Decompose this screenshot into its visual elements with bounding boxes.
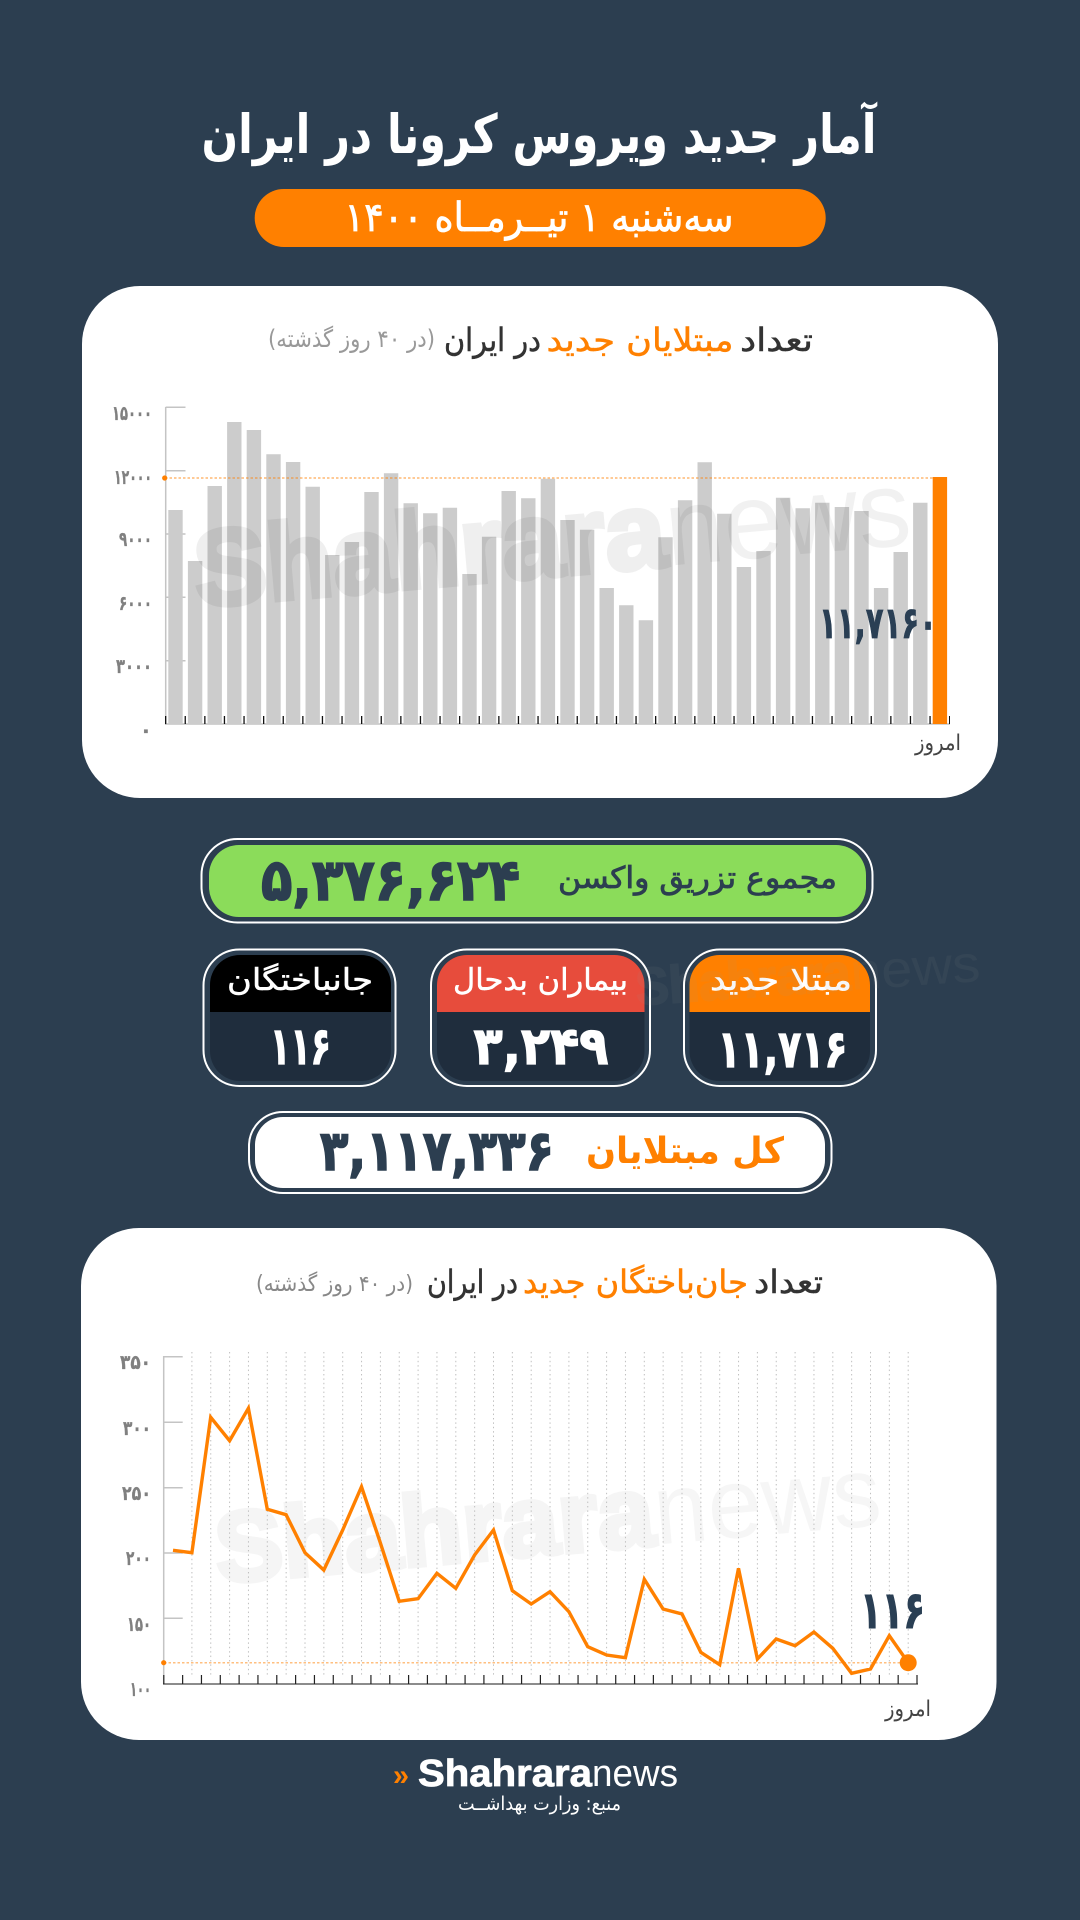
y axis labels xyxy=(120,1350,151,1701)
watermark: stats area xyxy=(634,935,982,1017)
footer logo: Shahrara xyxy=(418,1753,593,1795)
stat: total cases: کل مبتلایان xyxy=(586,1131,784,1172)
stat: critical patients xyxy=(431,950,650,1086)
heading: new cases: (در ۴۰ روز گذشته) xyxy=(268,325,435,353)
axis ticks xyxy=(163,1680,918,1684)
heading: deaths xyxy=(256,1263,823,1301)
today's point xyxy=(900,1654,917,1671)
y axis labels: ۲۰۰ xyxy=(126,1546,151,1570)
watermark xyxy=(210,1435,885,1605)
watermark: news xyxy=(648,1435,885,1567)
stat: critical patients: ۳,۲۴۹ xyxy=(474,1017,608,1077)
label: today: امروز xyxy=(884,1697,931,1722)
heading: new cases xyxy=(268,321,813,359)
footer logo: » xyxy=(393,1759,409,1792)
stat: total vaccinations xyxy=(202,839,872,922)
panel: new cases chart xyxy=(82,286,998,798)
y axis labels xyxy=(112,401,152,742)
watermark: Shahrara xyxy=(210,1455,660,1605)
panel: deaths chart xyxy=(81,1228,996,1740)
stat: new cases: ۱۱,۷۱۶ xyxy=(718,1020,848,1080)
axis lines xyxy=(164,1356,183,1684)
value label: today: ۱۱,۷۱۶۰ xyxy=(819,598,937,649)
vertical grid xyxy=(191,1352,909,1676)
watermark: news xyxy=(660,447,915,589)
line series: deaths xyxy=(173,1408,908,1673)
y axis labels: ۰ xyxy=(140,718,152,742)
y axis labels: ۱۲۰۰۰ xyxy=(114,465,152,489)
date pill: سه‌شنبه ۱ تیــرمــاه ۱۴۰۰ xyxy=(344,195,734,241)
heading: new cases: مبتلایان جدید xyxy=(546,321,734,359)
stat: deaths xyxy=(204,950,396,1086)
heading: deaths: در ایران xyxy=(427,1263,518,1301)
y axis labels: ۳۵۰ xyxy=(120,1350,151,1374)
axis lines xyxy=(165,407,950,725)
title: آمار جدید ویروس کرونا در ایران xyxy=(202,101,878,166)
date pill xyxy=(255,189,826,247)
axis ticks xyxy=(165,716,950,724)
heading: new cases: تعداد xyxy=(740,321,813,359)
watermark: Shahrara xyxy=(188,468,671,630)
y axis labels: ۶۰۰۰ xyxy=(119,591,152,615)
y axis labels: ۹۰۰۰ xyxy=(119,527,152,551)
bar: today xyxy=(933,477,947,724)
value label: today: ۱۱۶ xyxy=(860,1581,925,1641)
y axis labels: ۱۰۰ xyxy=(130,1677,151,1701)
stat: new cases: مبتلا جدید xyxy=(710,963,852,998)
watermark xyxy=(188,447,915,630)
today's reference line xyxy=(162,475,933,481)
y axis labels: ۲۵۰ xyxy=(122,1481,151,1505)
watermark: stats area: Shahrara xyxy=(634,944,853,1017)
stat: new cases xyxy=(684,950,876,1086)
footer logo: news xyxy=(592,1753,678,1795)
stat: total vaccinations: ۵,۳۷۶,۶۲۴ xyxy=(261,846,520,914)
y axis labels: ۳۰۰۰ xyxy=(116,654,152,678)
y axis labels: ۱۵۰ xyxy=(127,1612,151,1636)
y axis labels: ۱۵۰۰۰ xyxy=(112,401,152,425)
heading: deaths: جان‌باختگان جدید xyxy=(523,1263,748,1301)
watermark: stats area: news xyxy=(848,935,982,1002)
stat: deaths: جانباختگان xyxy=(227,963,373,998)
footer logo xyxy=(393,1753,678,1795)
stat: deaths: ۱۱۶ xyxy=(270,1017,331,1077)
stat: critical patients: بیماران بدحال xyxy=(453,963,628,998)
source: منبع: وزارت بهداشــت xyxy=(458,1793,621,1815)
stat: total cases xyxy=(249,1112,832,1193)
label: today: امروز xyxy=(914,731,961,756)
stat: total cases: ۳,۱۱۷,۳۳۶ xyxy=(320,1119,554,1184)
heading: new cases: در ایران xyxy=(444,321,541,359)
heading: deaths: (در ۴۰ روز گذشته) xyxy=(256,1271,413,1297)
heading: deaths: تعداد xyxy=(754,1263,823,1301)
today's reference line xyxy=(161,1660,908,1665)
bars: previous days xyxy=(168,422,928,724)
stat: total vaccinations: مجموع تزریق واکسن xyxy=(558,861,837,896)
y axis labels: ۳۰۰ xyxy=(123,1416,151,1440)
